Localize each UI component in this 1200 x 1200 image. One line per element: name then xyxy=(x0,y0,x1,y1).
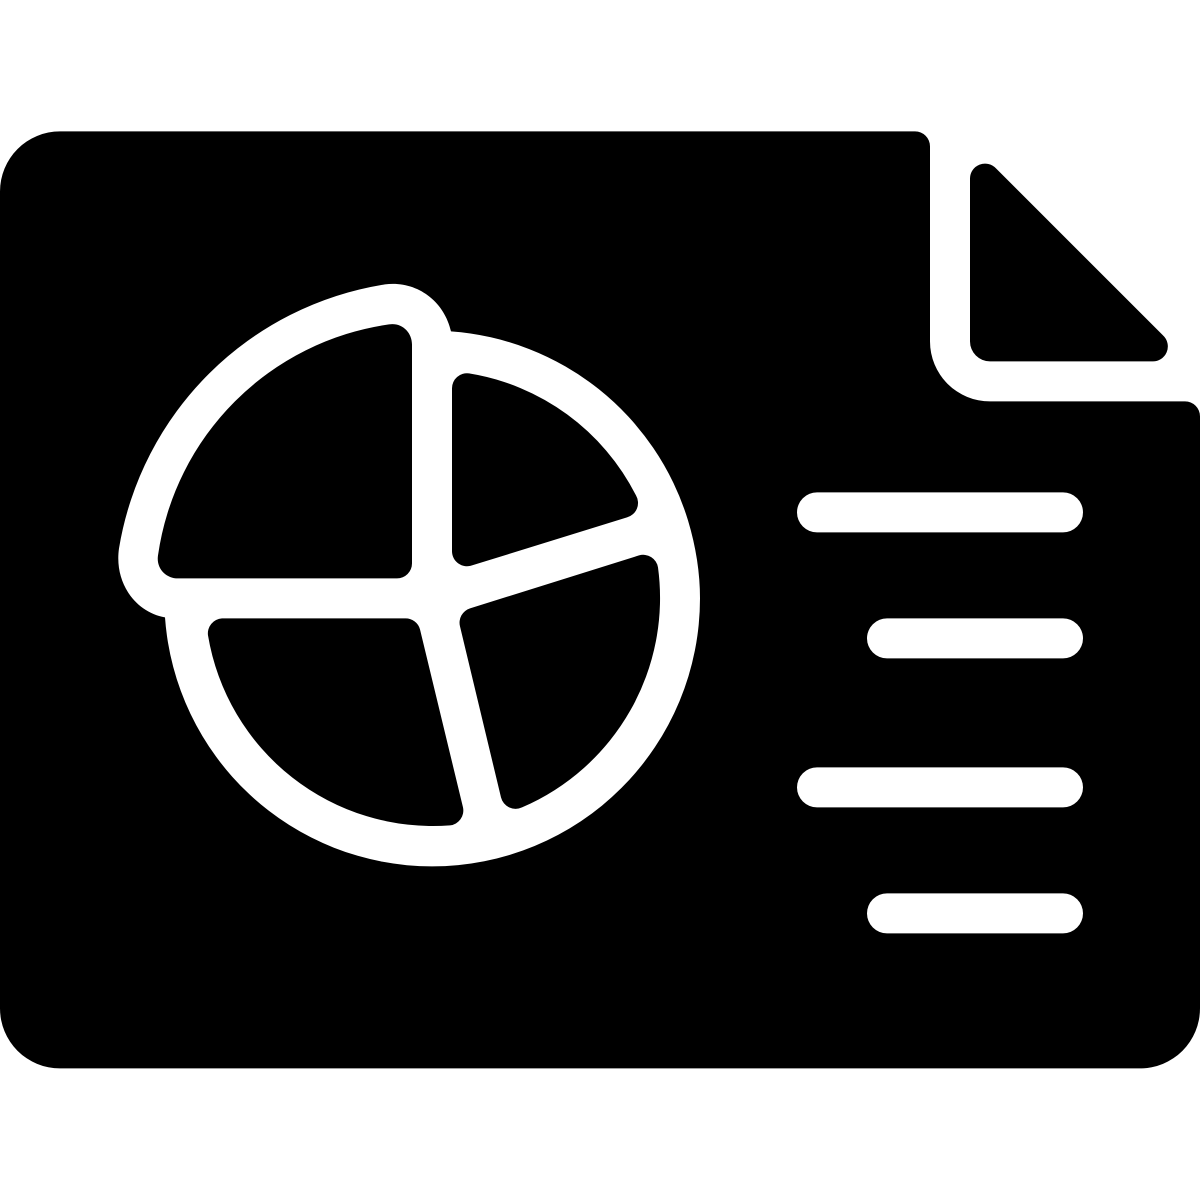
panel: document page xyxy=(0,131,1200,1068)
pie slice: top right xyxy=(452,373,638,566)
pie slice: top left xyxy=(158,324,412,578)
pie chart outline xyxy=(118,284,700,866)
text line 3 xyxy=(797,767,1083,807)
text lines xyxy=(797,492,1083,933)
icon: folded page corner xyxy=(970,164,1168,361)
text line 1 xyxy=(797,492,1083,532)
text line 2 xyxy=(867,618,1083,658)
pie chart xyxy=(118,284,700,866)
text line 4 xyxy=(867,893,1083,933)
pie slice: bottom left xyxy=(208,618,463,826)
pie slice: bottom right xyxy=(460,555,660,809)
